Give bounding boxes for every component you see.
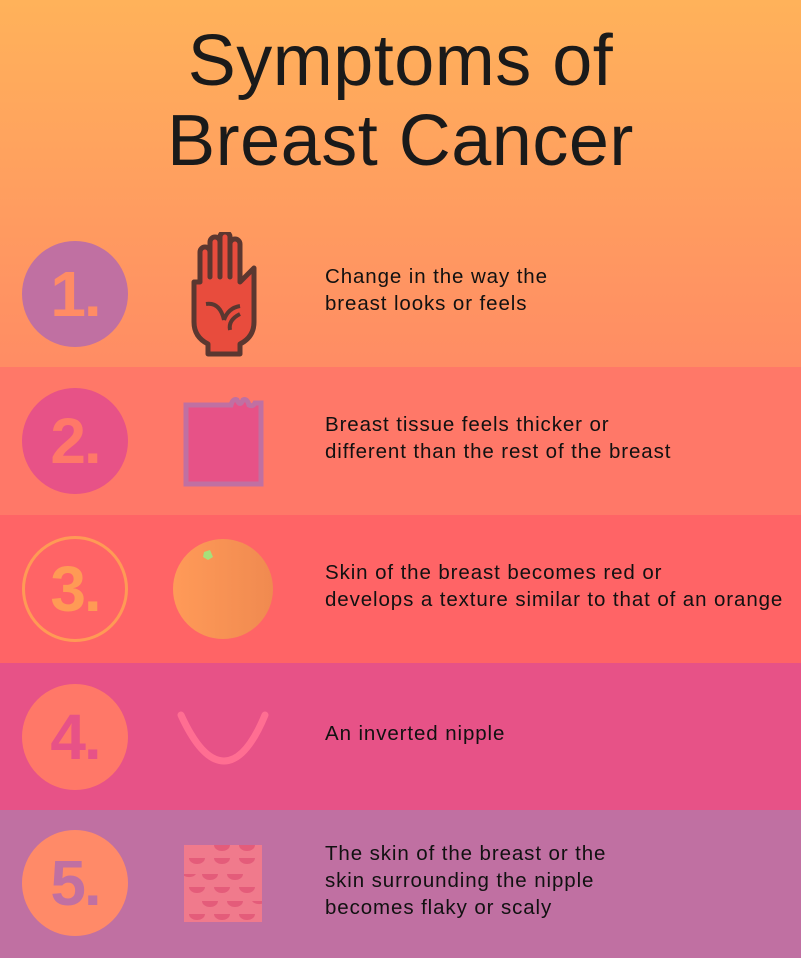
text 5: skin surrounding the nipple [325, 869, 594, 892]
number 5: 5. [50, 847, 100, 919]
text 1 [325, 265, 548, 315]
text 5: becomes flaky or scaly [325, 896, 552, 919]
row 3 [0, 515, 801, 663]
row 5 [0, 810, 801, 958]
number 1: 1. [50, 258, 100, 330]
text 5: The skin of the breast or the [325, 842, 606, 865]
icon: hand [192, 232, 256, 356]
number 3 [22, 536, 128, 642]
row 4 [0, 663, 801, 810]
row 2 [0, 367, 801, 515]
text 1: breast looks or feels [325, 292, 527, 315]
number 3: 3. [50, 553, 100, 625]
text 1: Change in the way the [325, 265, 548, 288]
number 4: 4. [50, 701, 100, 773]
number 1 [22, 241, 128, 347]
text 2 [325, 413, 671, 463]
text 3: develops a texture similar to that of an orange [325, 588, 783, 611]
text 4: An inverted nipple [325, 722, 505, 745]
icon: orange [173, 539, 273, 639]
icon: scaly skin [184, 845, 262, 922]
text 5 [325, 842, 606, 919]
icon: thick tissue square [184, 397, 264, 486]
text 3: Skin of the breast becomes red or [325, 561, 662, 584]
text 3 [325, 561, 783, 611]
title: Breast Cancer [167, 101, 634, 181]
number 2: 2. [50, 405, 100, 477]
icon: inverted nipple curve [178, 712, 268, 764]
number 4 [22, 684, 128, 790]
text 2: Breast tissue feels thicker or [325, 413, 610, 436]
title: Symptoms of [188, 21, 613, 101]
text 2: different than the rest of the breast [325, 440, 671, 463]
number 5 [22, 830, 128, 936]
title [167, 21, 634, 181]
row 1 [22, 232, 548, 356]
number 2 [22, 388, 128, 494]
